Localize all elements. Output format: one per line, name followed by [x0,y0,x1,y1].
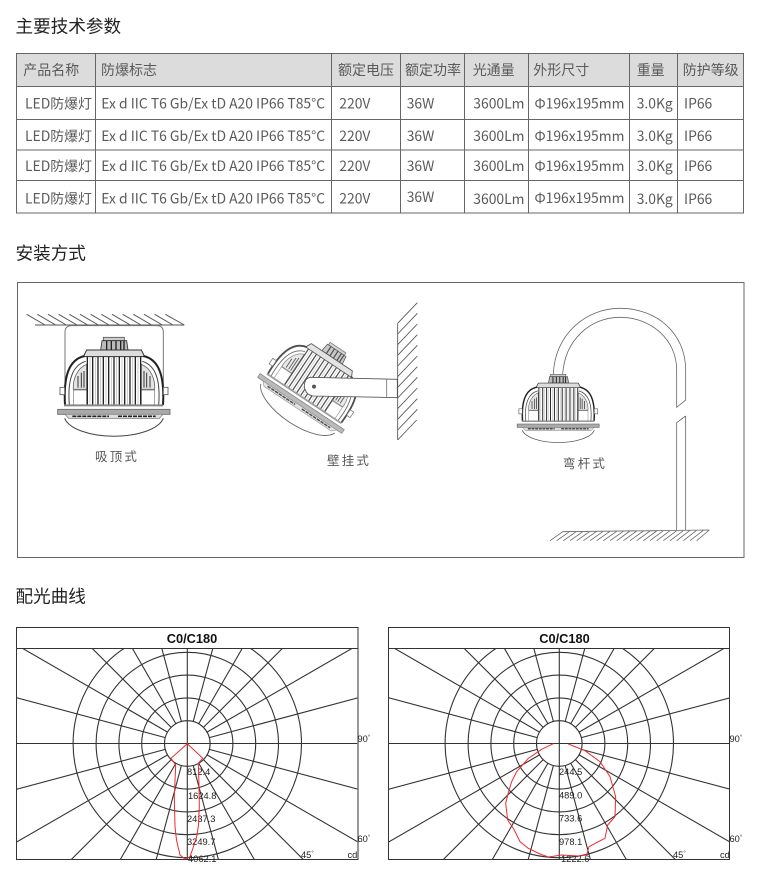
red intensity curve [171,744,203,859]
table row 3: 36W [407,155,434,175]
chart: polar light distribution, narrow beam [15,628,371,864]
intensity values [187,767,216,864]
angle labels: ° [311,851,314,857]
table row 3: 3600Lm [473,155,524,175]
curved pole mount illustration [517,308,709,541]
angle labels: 45 [301,850,311,860]
angle labels: 60 [358,834,368,844]
table row 3: Ex d IIC T6 Gb/Ex tD A20 IP66 T85°C [101,155,325,175]
table header row: 光通量 [473,60,515,80]
table row 2: 3.0Kg [637,125,673,145]
intensity values: 4062.1 [188,854,216,864]
intensity values: 978.1 [559,837,582,847]
table row 1: LED防爆灯 [25,92,92,112]
intensity values: 2437.3 [187,814,215,824]
table header row: 重量 [637,60,665,80]
caption: wall mount: 壁挂式 [327,450,371,469]
angle labels: ° [368,835,371,841]
angle labels [301,734,371,860]
table row 2: Φ196x195mm [534,125,624,145]
intensity values: 244.5 [559,767,582,777]
chart title: C0/C180 [539,631,590,646]
table row 4: 36W [407,186,434,206]
table row 3: 220V [339,155,370,175]
wall mount illustration [247,303,417,450]
table row 2: IP66 [684,125,713,145]
heading: installation methods: 安装方式 [16,240,86,266]
table row 2: LED防爆灯 [25,125,92,145]
table header row: 额定电压 [338,60,394,80]
table header row: 额定功率 [405,60,461,80]
heading: main technical parameters: 主要技术参数 [16,14,121,38]
table row 1: 36W [407,92,434,112]
table row 1: 3.0Kg [637,92,673,112]
table row 1 [25,92,713,112]
table row 2: Ex d IIC T6 Gb/Ex tD A20 IP66 T85°C [101,125,325,145]
table row 4: IP66 [684,188,713,208]
heading: light distribution curves: 配光曲线 [16,584,86,608]
intensity values [559,767,589,864]
table row 3: 3.0Kg [637,155,673,175]
table row 1: 3600Lm [473,92,524,112]
table header row: 产品名称 [23,60,79,80]
intensity values: 1624.8 [188,791,216,801]
table header row: 外形尺寸 [533,60,589,80]
angle labels: 45 [673,850,683,860]
table row 4 [25,186,713,208]
angle labels [673,734,743,860]
angle labels: 60 [730,834,740,844]
table row 4: 3600Lm [473,188,524,208]
table row 1: Ex d IIC T6 Gb/Ex tD A20 IP66 T85°C [101,92,325,112]
intensity values: 1222.6 [561,854,589,864]
table row 1: 220V [339,92,370,112]
table row 4: 220V [339,188,370,208]
chart title: C0/C180 [167,631,217,646]
chart: polar light distribution, wide beam [387,628,743,864]
intensity values: 812.4 [187,767,210,777]
intensity values: 489.0 [559,790,582,800]
angle labels: cd [720,850,730,860]
parameter table [16,54,744,213]
table row 3 [25,155,713,175]
red intensity curve [506,744,616,857]
table row 4: Φ196x195mm [534,187,624,207]
table row 2: 36W [407,125,434,145]
intensity values: 3249.7 [187,837,215,847]
table row 2: 220V [339,125,370,145]
table header row [16,54,744,86]
angle labels: 90 [358,734,368,744]
intensity values: 733.6 [559,814,582,824]
angle labels: ° [740,835,743,841]
table header row: 防护等级 [683,60,739,80]
table row 4: LED防爆灯 [25,188,92,208]
caption: ceiling mount: 吸顶式 [95,446,139,465]
caption: curved pole mount: 弯杆式 [563,453,607,472]
table row 2: 3600Lm [473,125,524,145]
angle labels: ° [740,735,743,741]
table row 1: Φ196x195mm [534,92,624,112]
panel: installation methods [18,282,744,558]
table row 2 [25,125,713,145]
angle labels: ° [368,735,371,741]
angle labels: ° [683,851,686,857]
table row 3: LED防爆灯 [25,155,92,175]
angle labels: cd [348,850,357,860]
table row 4: Ex d IIC T6 Gb/Ex tD A20 IP66 T85°C [101,188,325,208]
table row 3: Φ196x195mm [534,155,624,175]
ceiling mount illustration [27,314,184,436]
angle labels: 90 [730,734,740,744]
table row 4: 3.0Kg [637,188,673,208]
table header row: 防爆标志 [101,60,157,80]
table row 1: IP66 [684,92,713,112]
table row 3: IP66 [684,155,713,175]
